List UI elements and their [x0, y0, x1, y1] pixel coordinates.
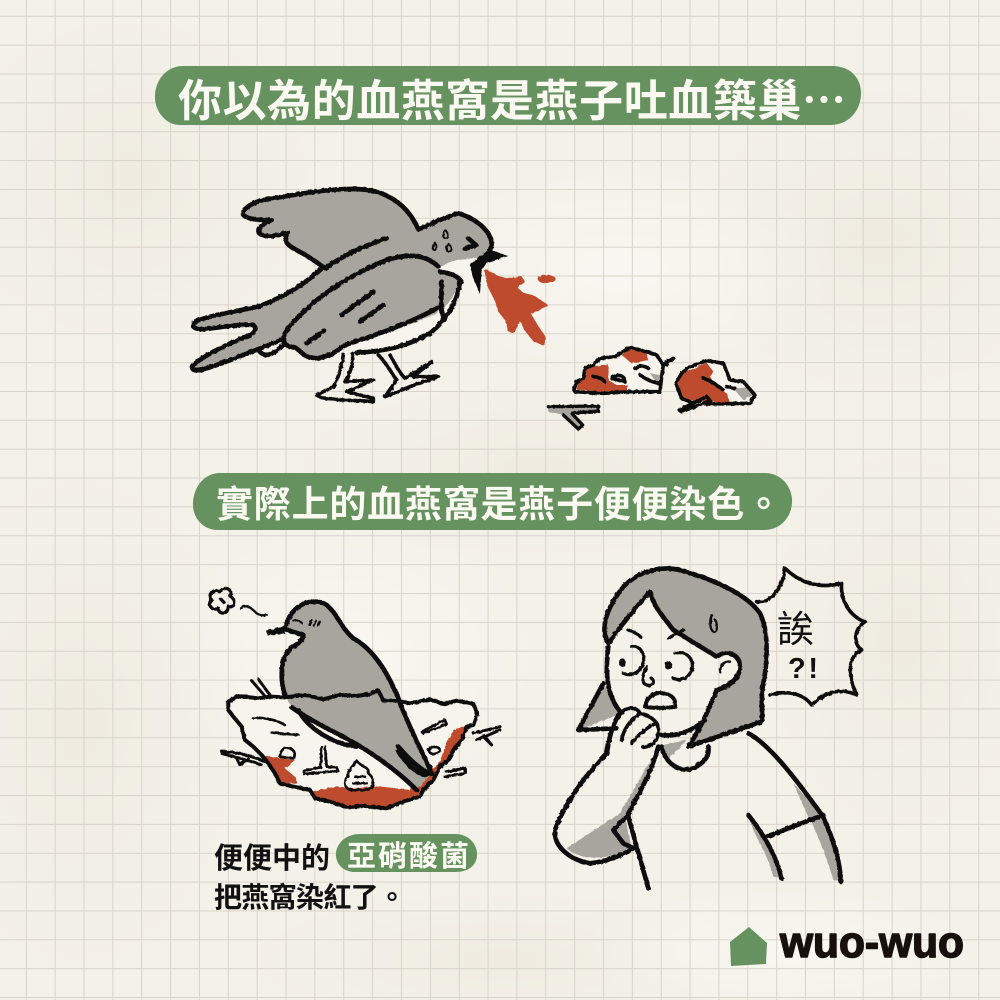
- logo: wordmark: wuo-wuo: [779, 918, 964, 967]
- nest: [228, 691, 477, 808]
- arm: [555, 713, 658, 888]
- hair and face outline: [578, 569, 767, 747]
- nest fragment left: [574, 347, 673, 393]
- burst outline: [757, 568, 865, 705]
- nest details: [253, 718, 447, 758]
- pill: bacteria: 亞硝酸菌: [347, 840, 469, 873]
- illustration: bird spitting blood: [192, 189, 556, 402]
- twigs: [222, 679, 500, 777]
- question marks: ?!: [788, 653, 818, 685]
- illustration: bird on nest: [210, 588, 500, 808]
- fingers: [620, 708, 658, 747]
- banner: second heading: 實際上的血燕窩是燕子便便染色。: [216, 484, 782, 525]
- pupils: [619, 658, 626, 667]
- mouth: [645, 693, 675, 708]
- sweat drop: [710, 615, 717, 632]
- eyes and brows: [623, 630, 692, 685]
- banner: second heading: [193, 473, 792, 530]
- blood splash: [486, 271, 546, 344]
- illustration: bloody nest fragments: [548, 347, 755, 429]
- bird legs: [317, 354, 438, 402]
- clothing shadows: [567, 740, 840, 882]
- bird outline: [282, 602, 432, 790]
- collar and shoulder: [662, 733, 841, 882]
- exclamation word: 誒: [777, 609, 814, 650]
- bird beak: [470, 249, 508, 294]
- banner: first heading: 你以為的血燕窩是燕子吐血築巢…: [178, 65, 846, 129]
- bird sweat: [433, 230, 452, 252]
- bird face details: [293, 620, 320, 626]
- twig on ground: [548, 406, 598, 429]
- bird body: [282, 602, 432, 790]
- caption line 2: 把燕窩染紅了。: [214, 882, 406, 913]
- scent flower: [210, 588, 234, 613]
- nest fragment right: [676, 361, 755, 412]
- illustration: surprised woman: [555, 569, 841, 888]
- bird outline: [192, 189, 492, 370]
- poop: [345, 761, 373, 790]
- speech burst: [757, 568, 865, 705]
- caption line 1: 便便中的: [214, 842, 330, 875]
- hair top: [604, 569, 767, 747]
- pupil right: [665, 661, 672, 670]
- bird beak: [266, 627, 285, 635]
- bird belly: [295, 710, 357, 747]
- bird leg: [304, 747, 338, 774]
- logo: green house icon: [730, 927, 767, 966]
- ear detail: [720, 662, 730, 672]
- nest red stain: [264, 726, 467, 808]
- hair back: [578, 683, 622, 730]
- bird gray body: [192, 189, 490, 370]
- scent squiggle: [241, 606, 267, 615]
- bird throat: [440, 259, 475, 278]
- bird belly: [347, 285, 460, 352]
- blood drop: [538, 275, 556, 283]
- nest outline: [228, 691, 477, 808]
